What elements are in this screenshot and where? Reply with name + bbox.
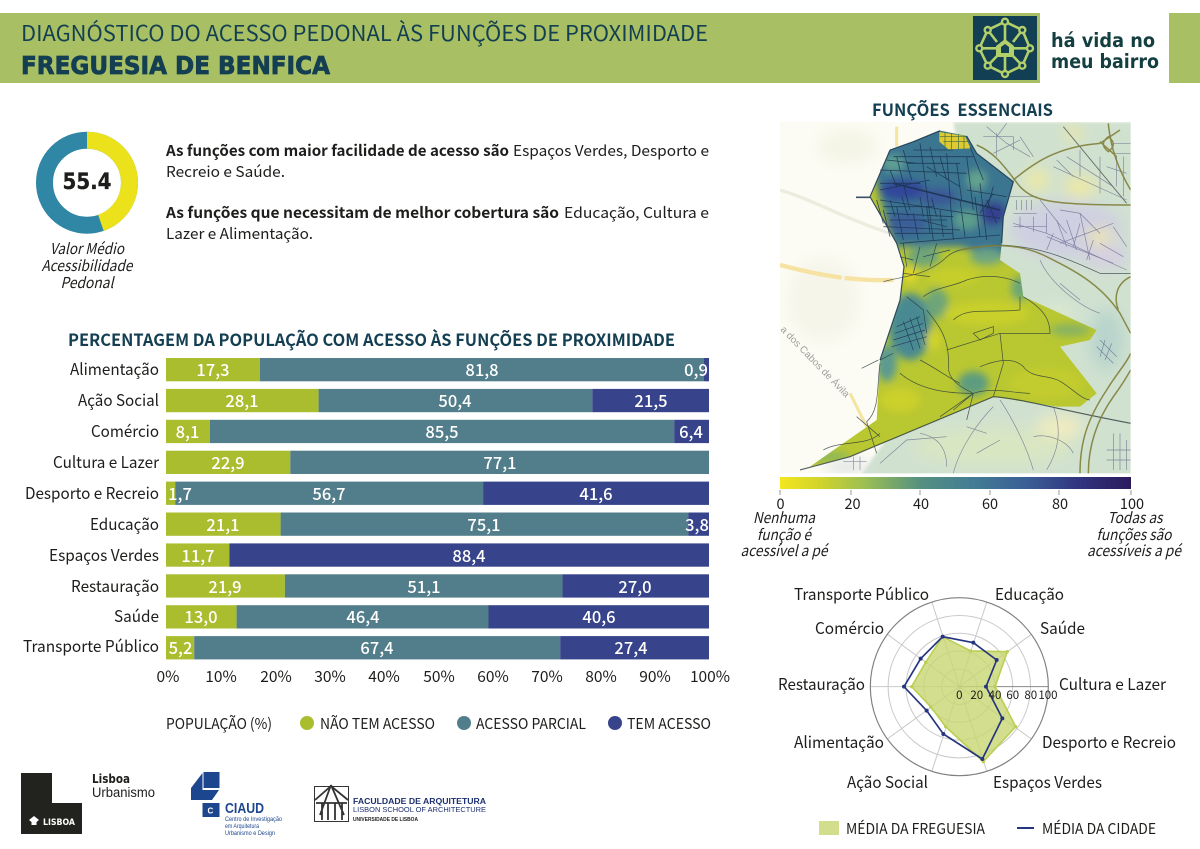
text block: summary: Espaços Verdes, Desporto e [513, 140, 709, 161]
row: Saúde: 46,4 [346, 604, 380, 628]
radar axis labels: Desporto e Recreio [1042, 729, 1176, 753]
row: Comércio [91, 418, 709, 443]
radar scale labels: 20 [970, 687, 983, 703]
row: Saúde [114, 603, 709, 628]
row: Educação: 3,8 [685, 512, 709, 536]
radar legend [819, 818, 1156, 839]
street network inside zone [856, 131, 1013, 360]
row: Ação Social: 50,4 [438, 388, 472, 412]
row: Restauração: 51,1 [407, 574, 441, 598]
axis labels: 70% [531, 665, 563, 687]
row: Saúde: 40,6 [582, 604, 616, 628]
row: Alimentação: 17,3 [196, 357, 230, 381]
row: Cultura e Lazer: 77,1 [483, 450, 517, 474]
text block: summary: As funções que necessitam de melhor cobertura são [165, 202, 559, 223]
bar chart legend: POPULAÇÃO (%) [166, 713, 272, 734]
bar chart legend: ACESSO PARCIAL [476, 713, 586, 734]
logo: Lisboa Urbanismo: Lisboa [92, 772, 130, 786]
text block: summary: As funções com maior facilidade de acesso são [165, 140, 509, 161]
radar legend: MÉDIA DA CIDADE [1042, 818, 1156, 839]
donut: valor médio acessibilidade pedonal [42, 140, 134, 293]
radar axis labels: Alimentação [794, 729, 884, 753]
scale caption: nenhuma função: função é [757, 524, 813, 545]
colour scale [776, 477, 1144, 514]
row: Ação Social [78, 387, 709, 412]
colour scale: 100 [1120, 493, 1144, 514]
radar axis labels: Saúde [1040, 615, 1085, 639]
radar axis labels [778, 581, 1176, 793]
row: Restauração: 21,9 [208, 574, 242, 598]
logo: Faculdade de Arquitetura: LISBON SCHOOL OF ARCHITECTURE [353, 805, 486, 814]
row: Espaços Verdes: 11,7 [181, 543, 215, 567]
title: DIAGNÓSTICO DO ACESSO PEDONAL ÀS FUNÇÕES DE PROXIMIDADE [21, 17, 708, 48]
logo: CIAUD: em Arquitetura [225, 823, 259, 830]
axis labels: 50% [423, 665, 455, 687]
radar scale labels [956, 687, 1058, 703]
row: Alimentação: 0,9 [684, 357, 708, 381]
main roads [800, 245, 1131, 470]
row: Cultura e Lazer [53, 449, 709, 474]
radar grid [870, 598, 1048, 776]
header band [0, 13, 1200, 83]
radar scale labels: 40 [989, 687, 1001, 703]
radar scale labels: 100 [1038, 687, 1058, 703]
row: Espaços Verdes [49, 542, 709, 567]
scale caption: todas as funções: funções são [1096, 524, 1173, 545]
colour scale: 20 [844, 493, 861, 514]
row: Cultura e Lazer: 22,9 [211, 450, 245, 474]
donut caption: Acessibilidade [42, 255, 134, 276]
row: Espaços Verdes: 88,4 [452, 543, 486, 567]
text block: summary: Recreio e Saúde. [166, 161, 285, 182]
map: funções essenciais [778, 122, 1133, 477]
axis labels: 100% [690, 665, 730, 687]
axis labels: 80% [585, 665, 617, 687]
logo: Lisboa Urbanismo [21, 772, 155, 834]
logo: Lisboa Urbanismo: Urbanismo [92, 785, 155, 800]
text block: summary: Lazer e Alimentação. [166, 223, 313, 244]
row: Desporto e Recreio: Desporto e Recreio [25, 480, 159, 504]
row: Transporte Público [23, 633, 709, 659]
radar scale labels: 80 [1024, 687, 1037, 703]
row: Educação: 21,1 [206, 512, 240, 536]
row: Ação Social: 21,5 [634, 388, 668, 412]
radar axis labels: Espaços Verdes [993, 769, 1102, 793]
donut caption: Pedonal [60, 272, 115, 293]
row: Desporto e Recreio: 56,7 [312, 481, 346, 505]
subtitle: FREGUESIA DE BENFICA [21, 51, 331, 80]
logo: há vida no meu bairro: meu bairro [1051, 50, 1159, 73]
row: Comércio: 6,4 [679, 419, 703, 443]
colour scale: 0 [776, 493, 785, 514]
logo: Lisboa Urbanismo: LISBOA [43, 818, 75, 828]
logo: há vida no meu bairro: há vida no [1051, 29, 1155, 52]
scale caption: todas as funções [1087, 507, 1183, 561]
logo: CIAUD: Centro de Investigação [225, 816, 282, 823]
scale caption: nenhuma função: Nenhuma [753, 507, 816, 528]
logo: Faculdade de Arquitetura: UNIVERSIDADE DE LISBOA [353, 817, 418, 823]
colour scale: 80 [1052, 493, 1068, 514]
scale caption: todas as funções: Todas as [1108, 507, 1164, 528]
logo: CIAUD [191, 772, 282, 837]
row: Alimentação [70, 356, 709, 381]
map heading: FUNÇÕES ESSENCIAIS [872, 96, 1053, 121]
radar chart [778, 581, 1176, 793]
colour scale: 40 [913, 493, 929, 514]
logo: Faculdade de Arquitetura: FACULDADE DE ARQUITETURA [353, 797, 486, 806]
row: Restauração: 27,0 [618, 574, 652, 598]
axis labels: 40% [368, 665, 400, 687]
colour scale: 60 [982, 493, 998, 514]
row: Restauração [71, 573, 709, 598]
row: Desporto e Recreio [25, 480, 709, 505]
logo: CIAUD: CIAUD [225, 801, 264, 817]
row: Alimentação: 81,8 [465, 357, 499, 381]
row: Espaços Verdes: Espaços Verdes [49, 542, 159, 566]
axis labels: 30% [314, 665, 346, 687]
row: Transporte Público: Transporte Público [23, 633, 159, 657]
radar legend: MÉDIA DA FREGUESIA [846, 818, 986, 839]
logo: CIAUD: C [208, 806, 214, 816]
row: Ação Social: Ação Social [78, 387, 159, 411]
axis labels: 0% [157, 665, 179, 687]
axis labels: 90% [639, 665, 671, 687]
radar axis labels: Ação Social [847, 769, 928, 793]
row: Transporte Público: 5,2 [169, 635, 192, 659]
axis labels: 20% [260, 665, 292, 687]
row: Desporto e Recreio: 1,7 [168, 481, 192, 505]
radar series: média da cidade [902, 635, 1004, 761]
row: Comércio: 85,5 [425, 419, 459, 443]
axis labels: 10% [205, 665, 237, 687]
row: Ação Social: 28,1 [225, 388, 259, 412]
row: Cultura e Lazer: Cultura e Lazer [53, 449, 160, 473]
row: Comércio: 8,1 [176, 419, 199, 443]
bar chart legend: TEM ACESSO [627, 713, 711, 734]
radar series: média da freguesia [910, 637, 1017, 763]
radar scale labels: 0 [956, 687, 962, 703]
yellow arterial roads [960, 123, 1131, 473]
scale caption: todas as funções: acessíveis a pé [1087, 540, 1183, 561]
row: Alimentação: Alimentação [70, 356, 159, 380]
radar axis labels: Transporte Público [794, 581, 929, 605]
row: Transporte Público: 27,4 [614, 635, 648, 659]
row: Educação: Educação [90, 511, 159, 535]
bar chart [23, 356, 730, 687]
axis labels [157, 665, 730, 687]
donut caption [42, 238, 134, 293]
row: Restauração: Restauração [71, 573, 159, 597]
scale caption: nenhuma função [740, 507, 829, 561]
row: Desporto e Recreio: 41,6 [579, 481, 613, 505]
axis labels: 60% [477, 665, 509, 687]
radar axis labels: Educação [995, 581, 1064, 605]
radar axis labels: Cultura e Lazer [1059, 671, 1167, 695]
logo: há vida no meu bairro [973, 16, 1159, 80]
row: Educação: 75,1 [467, 512, 501, 536]
donut value: 55.4 [62, 170, 112, 195]
logo: CIAUD: Urbanismo e Design [225, 830, 275, 837]
streets outside zone [843, 123, 1131, 473]
bar chart legend: NÃO TEM ACESSO [320, 713, 435, 734]
row: Saúde: Saúde [114, 603, 159, 627]
row: Educação [90, 511, 709, 536]
text block: summary: Educação, Cultura e [564, 202, 709, 223]
radar axis labels: Restauração [778, 671, 865, 695]
donut caption: Valor Médio [50, 238, 126, 259]
text block: summary [165, 140, 709, 244]
row: Transporte Público: 67,4 [360, 635, 394, 659]
chart heading: PERCENTAGEM DA POPULAÇÃO COM ACESSO ÀS FUNÇÕES DE PROXIMIDADE [68, 326, 675, 351]
logo: Faculdade de Arquitetura [314, 785, 486, 823]
row: Saúde: 13,0 [184, 604, 218, 628]
radar scale labels: 60 [1006, 687, 1019, 703]
bar chart legend [166, 713, 711, 734]
map: funções essenciais: a dos Cabos de Ávila [778, 323, 853, 400]
row: Comércio: Comércio [91, 418, 159, 442]
accessibility heat zone [810, 130, 1096, 466]
radar axis labels: Comércio [815, 615, 884, 639]
scale caption: nenhuma função: acessível a pé [740, 540, 829, 561]
